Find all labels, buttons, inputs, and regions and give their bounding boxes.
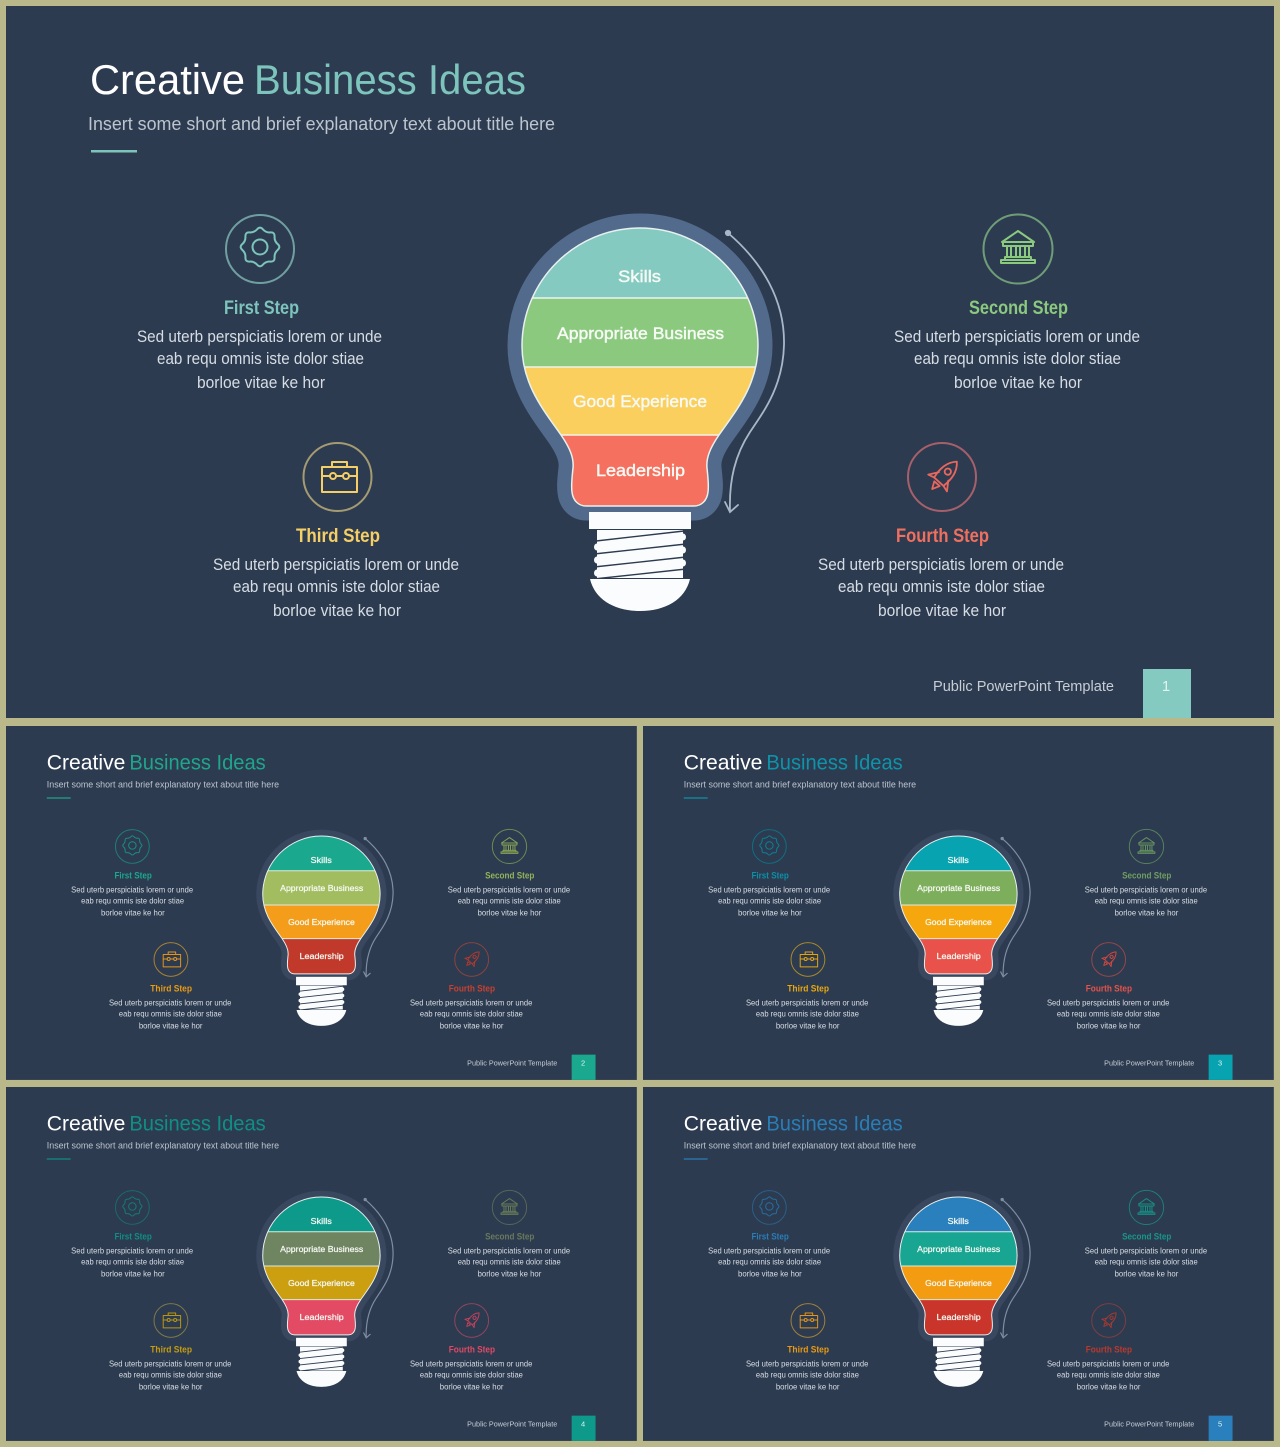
subtitle: Insert some short and brief explanatory text about title here — [88, 113, 555, 134]
icon: briefcase — [304, 443, 372, 511]
step heading: First Step — [751, 870, 789, 881]
curved arrow — [364, 1198, 393, 1338]
icon: gear — [226, 215, 294, 283]
step heading: Second Step — [1122, 870, 1172, 881]
footer label: Public PowerPoint Template — [467, 1059, 557, 1068]
step 4 — [410, 943, 533, 1030]
step body: Sed uterb perspiciatis lorem or unde — [71, 1247, 193, 1256]
slide 5 — [643, 1087, 1274, 1441]
label: skills: Skills — [310, 855, 332, 865]
step heading: First Step — [114, 870, 152, 881]
step body: eab requ omnis iste dolor stiae — [233, 578, 440, 596]
step 2 — [1085, 829, 1208, 917]
bulb base collar — [589, 512, 691, 529]
step body: Sed uterb perspiciatis lorem or unde — [410, 999, 533, 1008]
slide 4 — [6, 1087, 637, 1441]
step body: eab requ omnis iste dolor stiae — [458, 1257, 561, 1266]
step body: Sed uterb perspiciatis lorem or unde — [71, 886, 193, 895]
step heading: Fourth Step — [896, 526, 989, 547]
bulb coloured sections — [263, 1198, 380, 1334]
step body: eab requ omnis iste dolor stiae — [1057, 1009, 1160, 1018]
icon: bank — [984, 214, 1052, 284]
label: appropriate business: Appropriate Business — [917, 883, 1000, 893]
title: Creative — [47, 752, 125, 775]
step body: borloe vitae ke hor — [440, 1382, 504, 1391]
step body: borloe vitae ke hor — [878, 602, 1006, 620]
step heading: Third Step — [787, 983, 829, 994]
step 3 — [746, 943, 869, 1030]
page number box — [1209, 1055, 1233, 1080]
page number: 1 — [1162, 678, 1170, 695]
subtitle: Insert some short and brief explanatory text about title here — [47, 1140, 279, 1150]
icon: rocket — [1092, 943, 1126, 976]
bulb base collar — [933, 1338, 984, 1346]
label: leadership: Leadership — [937, 951, 981, 961]
step 2 — [1085, 1190, 1208, 1278]
title: Creative — [684, 1113, 762, 1136]
step body: Sed uterb perspiciatis lorem or unde — [109, 1360, 232, 1369]
step body: borloe vitae ke hor — [139, 1021, 203, 1030]
icon: bank — [1129, 829, 1164, 864]
slide background — [6, 1087, 637, 1441]
bulb dome — [297, 1010, 346, 1026]
label: appropriate business: Appropriate Business — [917, 1244, 1000, 1254]
step body: Sed uterb perspiciatis lorem or unde — [1047, 999, 1170, 1008]
light bulb diagram — [894, 832, 1030, 1026]
step body: eab requ omnis iste dolor stiae — [157, 350, 364, 368]
step body: Sed uterb perspiciatis lorem or unde — [1085, 886, 1208, 895]
step body: Sed uterb perspiciatis lorem or unde — [448, 1247, 571, 1256]
icon: bank — [492, 1190, 527, 1225]
step body: borloe vitae ke hor — [1077, 1382, 1141, 1391]
bulb coloured sections — [900, 836, 1017, 974]
page number: 3 — [1218, 1059, 1222, 1068]
step body: borloe vitae ke hor — [776, 1021, 840, 1030]
step 4 — [1047, 1304, 1170, 1391]
bulb base collar — [933, 977, 984, 985]
step body: Sed uterb perspiciatis lorem or unde — [1085, 1247, 1208, 1256]
step body: borloe vitae ke hor — [1077, 1021, 1141, 1030]
step body: borloe vitae ke hor — [776, 1382, 840, 1391]
step 3 — [109, 943, 232, 1030]
step body: eab requ omnis iste dolor stiae — [119, 1370, 222, 1379]
bulb halo — [900, 1197, 1017, 1335]
label: skills: Skills — [947, 855, 969, 865]
slide background — [6, 726, 637, 1080]
step 1 — [71, 1191, 193, 1278]
bulb screw thread — [936, 1347, 981, 1371]
title: Business Ideas — [766, 752, 903, 775]
label: leadership: Leadership — [596, 461, 685, 480]
step body: borloe vitae ke hor — [1115, 1269, 1179, 1278]
step 4 — [1047, 943, 1170, 1030]
step body: borloe vitae ke hor — [273, 602, 401, 620]
bulb dome — [590, 579, 690, 611]
slide background — [6, 6, 1274, 718]
icon: gear — [752, 830, 786, 863]
step heading: Third Step — [150, 983, 192, 994]
icon: briefcase — [791, 943, 825, 976]
step heading: Third Step — [296, 526, 380, 547]
step body: borloe vitae ke hor — [1115, 908, 1179, 917]
step body: eab requ omnis iste dolor stiae — [420, 1370, 523, 1379]
step body: eab requ omnis iste dolor stiae — [718, 896, 822, 905]
slide 3 — [643, 726, 1274, 1080]
light bulb diagram — [257, 1193, 393, 1387]
step body: Sed uterb perspiciatis lorem or unde — [746, 1360, 869, 1369]
icon: rocket — [455, 1304, 489, 1337]
title underline — [684, 1158, 708, 1160]
icon: rocket — [1092, 1304, 1126, 1337]
step heading: Third Step — [150, 1344, 192, 1355]
bulb coloured sections — [522, 228, 758, 506]
title: Business Ideas — [129, 1113, 266, 1136]
step heading: First Step — [751, 1231, 789, 1242]
icon: bank — [1129, 1190, 1164, 1225]
slide 2 — [6, 726, 637, 1080]
label: appropriate business: Appropriate Business — [557, 324, 724, 343]
step body: borloe vitae ke hor — [139, 1382, 203, 1391]
step body: borloe vitae ke hor — [478, 908, 542, 917]
page number: 4 — [581, 1420, 585, 1429]
step body: eab requ omnis iste dolor stiae — [458, 896, 561, 905]
step heading: Fourth Step — [449, 1344, 495, 1355]
step body: eab requ omnis iste dolor stiae — [914, 350, 1121, 368]
light bulb diagram — [257, 832, 393, 1026]
title: Business Ideas — [766, 1113, 903, 1136]
step body: eab requ omnis iste dolor stiae — [756, 1370, 859, 1379]
step body: Sed uterb perspiciatis lorem or unde — [109, 999, 232, 1008]
bulb halo — [263, 836, 380, 974]
bulb dome — [934, 1010, 983, 1026]
bulb outline — [900, 1197, 1017, 1335]
bulb screw thread — [936, 986, 981, 1010]
icon: briefcase — [791, 1304, 825, 1337]
step body: Sed uterb perspiciatis lorem or unde — [708, 886, 830, 895]
bulb dome — [934, 1371, 983, 1387]
step body: eab requ omnis iste dolor stiae — [1095, 1257, 1198, 1266]
light bulb diagram — [894, 1193, 1030, 1387]
label: leadership: Leadership — [937, 1312, 981, 1322]
step 2 — [894, 214, 1140, 392]
label: skills: Skills — [618, 267, 661, 286]
step body: eab requ omnis iste dolor stiae — [420, 1009, 523, 1018]
step 1 — [71, 830, 193, 917]
bulb screw thread — [594, 530, 686, 579]
title underline — [47, 797, 71, 799]
step heading: Second Step — [969, 298, 1068, 319]
title underline — [47, 1158, 71, 1160]
step body: borloe vitae ke hor — [954, 374, 1082, 392]
subtitle: Insert some short and brief explanatory text about title here — [684, 1140, 916, 1150]
label: good experience: Good Experience — [925, 917, 992, 927]
subtitle: Insert some short and brief explanatory text about title here — [47, 779, 279, 789]
label: good experience: Good Experience — [573, 392, 707, 411]
step body: borloe vitae ke hor — [197, 374, 325, 392]
label: skills: Skills — [947, 1216, 969, 1226]
bulb coloured sections — [263, 836, 380, 974]
footer label: Public PowerPoint Template — [1104, 1420, 1194, 1429]
label: leadership: Leadership — [300, 1312, 344, 1322]
curved arrow — [364, 837, 393, 977]
icon: briefcase — [154, 1304, 188, 1337]
page number box — [572, 1416, 596, 1441]
icon: bank — [492, 829, 527, 864]
slide 1: main large slide — [6, 6, 1274, 718]
bulb outline — [900, 836, 1017, 974]
icon: rocket — [455, 943, 489, 976]
step body: Sed uterb perspiciatis lorem or unde — [410, 1360, 533, 1369]
bulb outline — [522, 228, 758, 506]
step heading: Third Step — [787, 1344, 829, 1355]
footer label: Public PowerPoint Template — [1104, 1059, 1194, 1068]
step body: borloe vitae ke hor — [738, 1269, 802, 1278]
title underline — [91, 150, 137, 152]
title: Business Ideas — [254, 56, 526, 103]
label: appropriate business: Appropriate Business — [280, 1244, 363, 1254]
step heading: Fourth Step — [1086, 1344, 1132, 1355]
step 2 — [448, 1190, 571, 1278]
bulb base collar — [296, 977, 347, 985]
step body: borloe vitae ke hor — [478, 1269, 542, 1278]
step heading: Second Step — [1122, 1231, 1172, 1242]
title: Business Ideas — [129, 752, 266, 775]
step body: borloe vitae ke hor — [738, 908, 802, 917]
bulb screw thread — [299, 986, 344, 1010]
step 4 — [818, 443, 1064, 620]
icon: briefcase — [154, 943, 188, 976]
step heading: First Step — [224, 298, 299, 319]
bulb coloured sections — [900, 1198, 1017, 1334]
step heading: Second Step — [485, 870, 535, 881]
curved arrow — [1001, 1198, 1030, 1338]
step 3 — [746, 1304, 869, 1391]
step body: Sed uterb perspiciatis lorem or unde — [448, 886, 571, 895]
step body: eab requ omnis iste dolor stiae — [119, 1009, 222, 1018]
bulb halo — [900, 836, 1017, 974]
step 2 — [448, 829, 571, 917]
bulb halo — [522, 228, 758, 506]
page number box — [1209, 1416, 1233, 1441]
bulb dome — [297, 1371, 346, 1387]
step 1 — [137, 215, 382, 392]
title: Creative — [47, 1113, 125, 1136]
page number box — [572, 1055, 596, 1080]
title underline — [684, 797, 708, 799]
step 1 — [708, 830, 830, 917]
label: good experience: Good Experience — [288, 917, 355, 927]
step heading: Fourth Step — [449, 983, 495, 994]
subtitle: Insert some short and brief explanatory text about title here — [684, 779, 916, 789]
step body: Sed uterb perspiciatis lorem or unde — [894, 328, 1140, 346]
curved arrow — [725, 231, 784, 512]
step body: Sed uterb perspiciatis lorem or unde — [818, 556, 1064, 574]
step body: Sed uterb perspiciatis lorem or unde — [1047, 1360, 1170, 1369]
step 4 — [410, 1304, 533, 1391]
bulb base collar — [296, 1338, 347, 1346]
step body: borloe vitae ke hor — [101, 1269, 165, 1278]
step body: eab requ omnis iste dolor stiae — [838, 578, 1045, 596]
icon: rocket — [908, 443, 976, 511]
page number: 2 — [581, 1059, 585, 1068]
step body: Sed uterb perspiciatis lorem or unde — [213, 556, 459, 574]
step body: eab requ omnis iste dolor stiae — [718, 1257, 822, 1266]
slide background — [643, 726, 1274, 1080]
title: Creative — [684, 752, 762, 775]
step body: Sed uterb perspiciatis lorem or unde — [708, 1247, 830, 1256]
bulb halo — [263, 1197, 380, 1335]
step 1 — [708, 1191, 830, 1278]
label: good experience: Good Experience — [288, 1278, 355, 1288]
label: good experience: Good Experience — [925, 1278, 992, 1288]
step body: borloe vitae ke hor — [440, 1021, 504, 1030]
title: Creative — [90, 56, 245, 103]
label: skills: Skills — [310, 1216, 332, 1226]
step 3 — [109, 1304, 232, 1391]
footer label: Public PowerPoint Template — [933, 679, 1114, 695]
light bulb diagram — [510, 220, 784, 611]
bulb outline — [263, 836, 380, 974]
icon: gear — [115, 1191, 149, 1224]
step body: Sed uterb perspiciatis lorem or unde — [746, 999, 869, 1008]
step body: eab requ omnis iste dolor stiae — [1095, 896, 1198, 905]
step body: eab requ omnis iste dolor stiae — [81, 896, 185, 905]
step 3 — [213, 443, 459, 620]
step heading: Fourth Step — [1086, 983, 1132, 994]
step body: eab requ omnis iste dolor stiae — [756, 1009, 859, 1018]
step heading: Second Step — [485, 1231, 535, 1242]
page number box — [1143, 669, 1191, 718]
step body: eab requ omnis iste dolor stiae — [1057, 1370, 1160, 1379]
step body: eab requ omnis iste dolor stiae — [81, 1257, 185, 1266]
page number: 5 — [1218, 1420, 1222, 1429]
step heading: First Step — [114, 1231, 152, 1242]
label: leadership: Leadership — [300, 951, 344, 961]
step body: borloe vitae ke hor — [101, 908, 165, 917]
curved arrow — [1001, 837, 1030, 977]
step body: Sed uterb perspiciatis lorem or unde — [137, 328, 382, 346]
bulb screw thread — [299, 1347, 344, 1371]
bulb outline — [263, 1197, 380, 1335]
icon: gear — [752, 1191, 786, 1224]
icon: gear — [115, 830, 149, 863]
label: appropriate business: Appropriate Business — [280, 883, 363, 893]
slide background — [643, 1087, 1274, 1441]
footer label: Public PowerPoint Template — [467, 1420, 557, 1429]
